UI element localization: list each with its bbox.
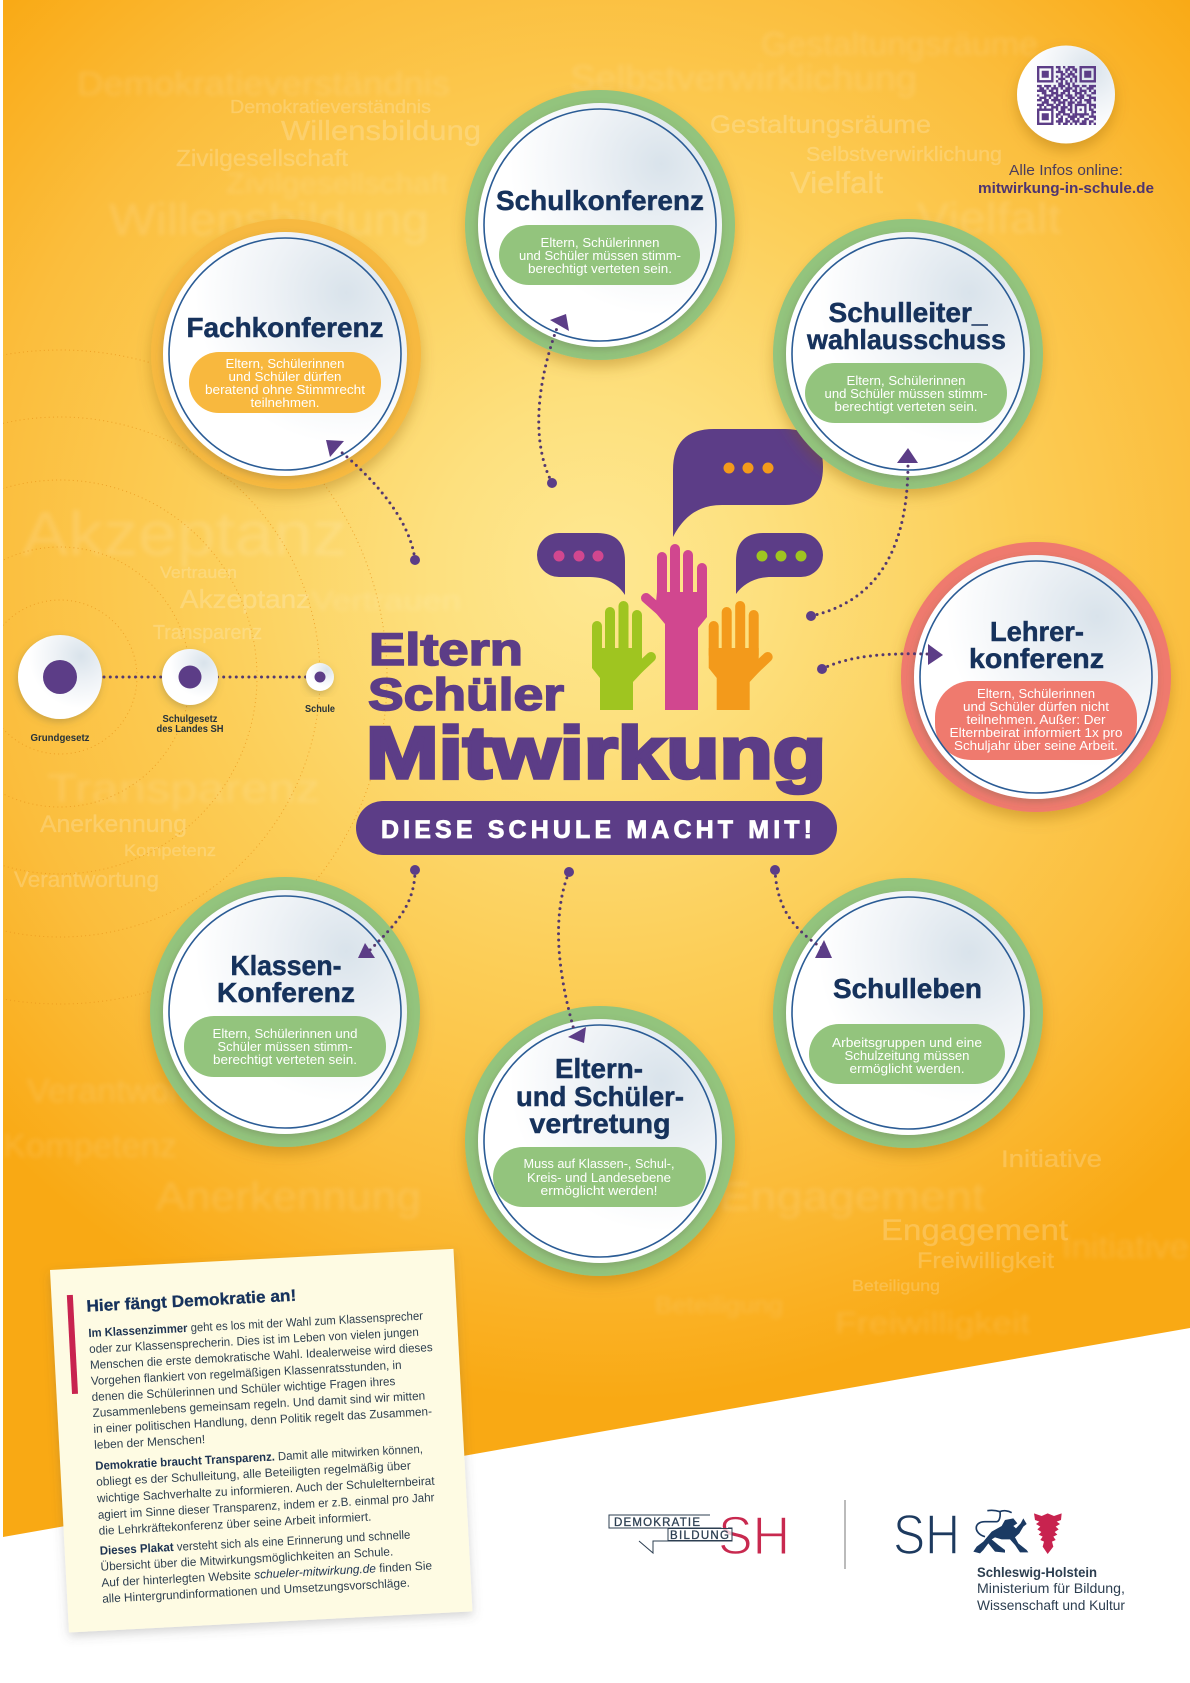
callout: Fachkonferenz rule: Eltern, Schülerinnen bbox=[226, 356, 344, 371]
text: ministry name: Ministerium für Bildung, bbox=[977, 1580, 1125, 1596]
title: Eltern Schüler Mitwirkung bbox=[366, 624, 826, 794]
panel: Schulkonferenz bbox=[465, 90, 735, 360]
arrow: to Schulleiterwahlausschuss bbox=[806, 448, 918, 621]
panel: Schulleben bbox=[773, 878, 1043, 1148]
node: Schulgesetz des Landes SH: des Landes SH bbox=[156, 723, 224, 735]
node: Schulgesetz des Landes SH bbox=[156, 649, 224, 735]
callout: Schulleiterwahlausschuss rule: Eltern, Schülerinnen bbox=[846, 373, 966, 388]
text block: note body: obliegt es der Schulleitung, alle Beteiligten regelmäßig über bbox=[96, 1458, 411, 1489]
callout: Lehrerkonferenz rule: Elternbeirat informiert 1x pro bbox=[950, 725, 1122, 740]
text block: note body: alle Hintergrundinformationen und Umsetzungsvorschläge. bbox=[102, 1576, 410, 1606]
title: Eltern Schüler Mitwirkung: Mitwirkung bbox=[366, 713, 826, 794]
icon: large speech bubble bbox=[673, 429, 823, 537]
background word cloud: crisp words: Beteiligung bbox=[852, 1278, 940, 1295]
callout: Elternvertretung rule: Muss auf Klassen-, Schul-, bbox=[524, 1156, 674, 1171]
background word cloud: blurred large words: Initiative bbox=[1062, 1228, 1189, 1265]
callout: Schulleben rule: ermöglicht werden. bbox=[850, 1061, 964, 1076]
node: Grundgesetz: Grundgesetz bbox=[30, 732, 90, 744]
panel: note "Hier fängt Demokratie an!" bbox=[50, 1249, 472, 1633]
callout: Schulleben rule bbox=[809, 1024, 1005, 1084]
logo: Demokratie Bildung SH: BILDUNG bbox=[670, 1530, 729, 1542]
background word cloud: blurred large words: Willensbildung bbox=[109, 194, 429, 245]
text block: note body: wichtige Sachverhalte zu informieren. Auch der Schulelternbeirat bbox=[96, 1474, 436, 1505]
callout: Schulleiterwahlausschuss rule bbox=[805, 363, 1007, 423]
heading: Schulleiter_wahlausschuss: Schulleiter_ bbox=[828, 297, 988, 328]
background word cloud: blurred large words: Demokratieverständnis bbox=[77, 65, 450, 102]
background word cloud: crisp words: Vertrauen bbox=[160, 563, 237, 582]
callout: Lehrerkonferenz rule: und Schüler dürfen nicht bbox=[963, 699, 1109, 714]
callout: Elternvertretung rule: Kreis- und Landesebene bbox=[527, 1170, 671, 1185]
text block: note body: in einer politischen Handlung, denn Politik regelt das Zusammen- bbox=[93, 1404, 432, 1436]
background word cloud: blurred large words: Gestaltungsräume bbox=[761, 26, 1038, 62]
arrows: dotted connectors from centre to panels bbox=[326, 314, 943, 1043]
callout: Schulleiterwahlausschuss rule: und Schüler müssen stimm- bbox=[824, 386, 988, 401]
logo: Demokratie Bildung SH: SH bbox=[718, 1506, 790, 1566]
text block: note body: Vorgehen flankiert von regelmäßigen Klassenratsstunden, in bbox=[90, 1358, 402, 1388]
background word cloud: crisp words: Initiative bbox=[1001, 1146, 1102, 1173]
heading: Hier fängt Demokratie an: Hier fängt Demokratie an! bbox=[86, 1287, 297, 1316]
arrow: to Schulkonferenz bbox=[539, 314, 569, 488]
logo: Demokratie Bildung SH bbox=[609, 1506, 790, 1566]
text block: note body: leben der Menschen! bbox=[94, 1432, 205, 1452]
heading: Schulleben: Schulleben bbox=[833, 973, 982, 1004]
icon: QR code bbox=[1037, 66, 1096, 125]
text block: note body: Im Klassenzimmer geht es los mit der Wahl zum Klassensprecher bbox=[88, 1309, 423, 1340]
background word cloud: crisp words: Vielfalt bbox=[790, 165, 883, 200]
callout: Schulkonferenz rule: berechtigt verteten sein. bbox=[528, 261, 672, 276]
callout: Schulleiterwahlausschuss rule: berechtigt verteten sein. bbox=[834, 399, 978, 414]
heading: Eltern- und Schülervertretung: Eltern- bbox=[555, 1053, 643, 1084]
background word cloud: blurred large words: Verantwortung bbox=[27, 1072, 247, 1109]
callout: Fachkonferenz rule: beratend ohne Stimmrecht bbox=[205, 382, 365, 397]
background word cloud: crisp words: Demokratieverständnis bbox=[230, 97, 431, 117]
arrow: to Fachkonferenz bbox=[326, 440, 420, 565]
heading: Lehrerkonferenz bbox=[969, 616, 1104, 674]
icon: right speech bubble bbox=[736, 533, 823, 594]
icon: nettle leaf crest bbox=[1034, 1513, 1062, 1554]
text: ministry name bbox=[977, 1564, 1125, 1613]
text block: note body: agiert im Sinne dieser Transparenz, indem er z.B. einmal pro Jahr bbox=[98, 1490, 435, 1522]
background word cloud: crisp words: Kompetenz bbox=[124, 841, 216, 860]
text: online info bbox=[978, 162, 1154, 197]
arrow: to Klassenkonferenz bbox=[358, 865, 420, 958]
background word cloud: blurred large words: Akzeptanz bbox=[22, 500, 347, 569]
background word cloud: blurred large words: Kompetenz bbox=[3, 1127, 177, 1164]
heading: Schulleiter_wahlausschuss bbox=[806, 297, 1006, 355]
node: Schule bbox=[305, 663, 335, 715]
icon: green hand bbox=[592, 606, 651, 710]
callout: Lehrerkonferenz rule bbox=[935, 681, 1137, 760]
callout: Klassenkonferenz rule: Schüler müssen stimm- bbox=[218, 1039, 352, 1054]
text: online info: Alle Infos online: bbox=[1009, 162, 1123, 179]
panel: Klassenkonferenz bbox=[150, 877, 420, 1147]
text block: note body: oder zur Klassensprecherin. Dies ist im Leben von vielen jungen bbox=[89, 1325, 419, 1356]
arrow: to Schulleben bbox=[770, 865, 832, 958]
heading: Klassen-Konferenz: Klassen- bbox=[230, 950, 342, 981]
background word cloud: crisp words: Anerkennung bbox=[40, 811, 187, 838]
icon: lion bbox=[973, 1510, 1028, 1553]
background word cloud: crisp words: Engagement bbox=[881, 1214, 1069, 1247]
text block: note body bbox=[87, 1308, 445, 1606]
background word cloud: crisp words: Transparenz bbox=[153, 622, 262, 644]
node: Grundgesetz bbox=[18, 635, 102, 744]
title: Eltern Schüler Mitwirkung: Eltern bbox=[369, 624, 523, 675]
text: ministry name: Schleswig-Holstein bbox=[977, 1564, 1097, 1580]
callout: Klassenkonferenz rule: Eltern, Schülerinnen und bbox=[212, 1026, 358, 1041]
heading: Lehrerkonferenz: konferenz bbox=[969, 643, 1104, 674]
background word cloud: blurred large words bbox=[3, 26, 1189, 1340]
panel: Eltern- und Schülervertretung bbox=[465, 1006, 735, 1276]
heading: Klassen-Konferenz bbox=[217, 950, 355, 1008]
background word cloud: crisp words: Gestaltungsräume bbox=[710, 111, 931, 139]
background word cloud: crisp words bbox=[14, 97, 1102, 1295]
callout: Klassenkonferenz rule bbox=[184, 1016, 386, 1077]
background word cloud: crisp words: Zivilgesellschaft bbox=[176, 145, 349, 171]
background word cloud: crisp words: Selbstverwirklichung bbox=[806, 144, 1002, 166]
background word cloud: blurred large words: Vielfalt bbox=[917, 194, 1061, 243]
background word cloud: blurred large words: Vertrauen bbox=[311, 585, 461, 616]
background word cloud: blurred large words: Transparenz bbox=[47, 767, 320, 811]
text block: note body: Menschen die erste demokratische Wahl. Idealerweise wird dieses bbox=[90, 1340, 433, 1372]
logo: Demokratie Bildung SH: DEMOKRATIE bbox=[614, 1517, 700, 1529]
background word cloud: blurred large words: Anerkennung bbox=[156, 1175, 421, 1219]
callout: Lehrerkonferenz rule: teilnehmen. Außer: Der bbox=[966, 712, 1106, 727]
background word cloud: crisp words: Akzeptanz bbox=[180, 584, 310, 614]
heading: Eltern- und Schülervertretung: und Schüler- bbox=[516, 1081, 684, 1112]
text block: note body: Dieses Plakat versteht sich als eine Erinnerung und schnelle bbox=[99, 1527, 411, 1558]
text block: note body: Demokratie braucht Transparenz. Damit alle mitwirken können, bbox=[95, 1442, 423, 1473]
heading: Schulleiter_wahlausschuss: wahlausschuss bbox=[806, 324, 1006, 355]
text block: note body: Übersicht über die Mitwirkungsmöglichkeiten an Schule. bbox=[100, 1544, 394, 1574]
background word cloud: crisp words: Freiwilligkeit bbox=[917, 1248, 1054, 1273]
icon: left speech bubble bbox=[537, 533, 625, 595]
panel: Lehrerkonferenz bbox=[901, 542, 1171, 812]
logo: Schleswig-Holstein bbox=[893, 1503, 1125, 1613]
callout: Klassenkonferenz rule: berechtigt verteten sein. bbox=[213, 1052, 357, 1067]
callout: Lehrerkonferenz rule: Schuljahr über seine Arbeit. bbox=[954, 738, 1118, 753]
text block: note body: Zusammenlebens gemeinsam regeln. Und damit sind wir mitten bbox=[92, 1389, 425, 1420]
callout: Schulkonferenz rule: und Schüler müssen stimm- bbox=[519, 248, 681, 263]
background word cloud: blurred large words: Freiwilligkeit bbox=[835, 1307, 1031, 1340]
heading: Schulkonferenz: Schulkonferenz bbox=[496, 185, 704, 216]
arrow: to Lehrerkonferenz bbox=[817, 644, 943, 674]
background word cloud: crisp words: Willensbildung bbox=[281, 115, 481, 146]
heading: Eltern- und Schülervertretung: vertretung bbox=[530, 1108, 670, 1139]
background word cloud: blurred large words: Zivilgesellschaft bbox=[226, 168, 448, 200]
icon: orange hand bbox=[709, 606, 768, 710]
callout: Schulleben rule: Schulzeitung müssen bbox=[844, 1048, 970, 1063]
text: online info: mitwirkung-in-schule.de bbox=[978, 180, 1154, 197]
title: Eltern Schüler Mitwirkung: Schüler bbox=[368, 669, 564, 720]
icon: pink hand bbox=[646, 549, 707, 710]
panel: Schulleiterwahlausschuss bbox=[773, 219, 1043, 489]
heading: Lehrerkonferenz: Lehrer- bbox=[990, 616, 1084, 647]
panel: Fachkonferenz bbox=[151, 219, 421, 489]
arrow: to Elternvertretung bbox=[559, 867, 586, 1043]
concentric dotted circles around Grundgesetz bbox=[0, 350, 387, 1004]
callout: Schulkonferenz rule: Eltern, Schülerinnen bbox=[540, 235, 660, 250]
background word cloud: crisp words: Verantwortung bbox=[14, 867, 159, 892]
callout: Lehrerkonferenz rule: Eltern, Schülerinnen bbox=[977, 686, 1095, 701]
background word cloud: blurred large words: Beteiligung bbox=[655, 1292, 783, 1318]
callout: Elternvertretung rule: ermöglicht werden! bbox=[540, 1183, 658, 1198]
text block: note body: die Lehrkräftekonferenz über seine Arbeit informiert. bbox=[98, 1510, 372, 1538]
callout: Fachkonferenz rule bbox=[189, 352, 381, 413]
callout: Schulleben rule: Arbeitsgruppen und eine bbox=[832, 1035, 982, 1050]
callout: Schulkonferenz rule bbox=[499, 225, 700, 285]
banner: Diese Schule macht mit: DIESE SCHULE MACHT MIT! bbox=[381, 816, 812, 844]
callout: Fachkonferenz rule: teilnehmen. bbox=[250, 395, 320, 410]
central logo: speech bubbles and raised hands bbox=[537, 429, 823, 710]
node: Schule: Schule bbox=[305, 703, 335, 715]
dotted connector between levels bbox=[104, 676, 306, 678]
logo: Schleswig-Holstein: SH bbox=[893, 1503, 960, 1567]
heading: Eltern- und Schülervertretung bbox=[516, 1053, 684, 1139]
QR code badge bbox=[1017, 46, 1115, 144]
background word cloud: blurred large words: Engagement bbox=[719, 1175, 985, 1219]
text: ministry name: Wissenschaft und Kultur bbox=[977, 1597, 1125, 1613]
background word cloud: blurred large words: Selbstverwirklichung bbox=[570, 59, 917, 98]
heading: Klassen-Konferenz: Konferenz bbox=[217, 977, 355, 1008]
banner: Diese Schule macht mit bbox=[356, 801, 837, 855]
text block: note body: Auf der hinterlegten Website schueler-mitwirkung.de finden Sie bbox=[101, 1558, 433, 1590]
text block: note body: denen die Schülerinnen und Schüler wichtige Fragen ihres bbox=[91, 1374, 396, 1404]
node: Schulgesetz des Landes SH: Schulgesetz bbox=[162, 713, 218, 725]
callout: Elternvertretung rule bbox=[493, 1147, 706, 1207]
heading: Fachkonferenz: Fachkonferenz bbox=[186, 312, 384, 343]
callout: Fachkonferenz rule: und Schüler dürfen bbox=[228, 369, 342, 384]
legal levels chain: Grundgesetz, Schulgesetz, Schule bbox=[18, 635, 335, 744]
